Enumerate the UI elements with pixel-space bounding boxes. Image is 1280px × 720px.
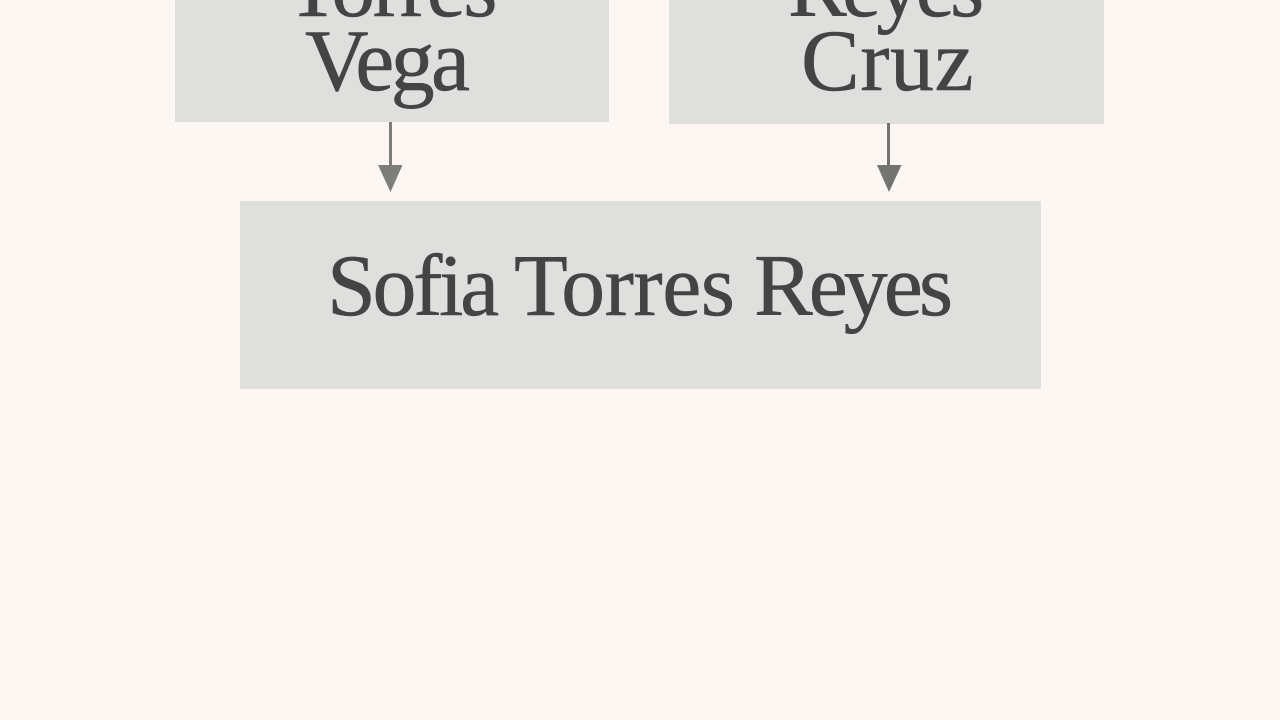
name: Torres Vega: Vega [305, 13, 469, 110]
name: Sofia Torres Reyes: Sofia [327, 238, 498, 335]
arrow: Torres Vega to child [378, 122, 402, 192]
name: Reyes Cruz: Cruz [801, 13, 974, 110]
arrow: Reyes Cruz to child [877, 123, 902, 192]
name: Sofia Torres Reyes: Torres [514, 238, 735, 335]
panel: child Sofia Torres Reyes [240, 201, 1041, 389]
panel: parent Torres Vega [175, 0, 609, 122]
name: Sofia Torres Reyes: Reyes [754, 238, 951, 335]
panel: parent Reyes Cruz [669, 0, 1104, 124]
